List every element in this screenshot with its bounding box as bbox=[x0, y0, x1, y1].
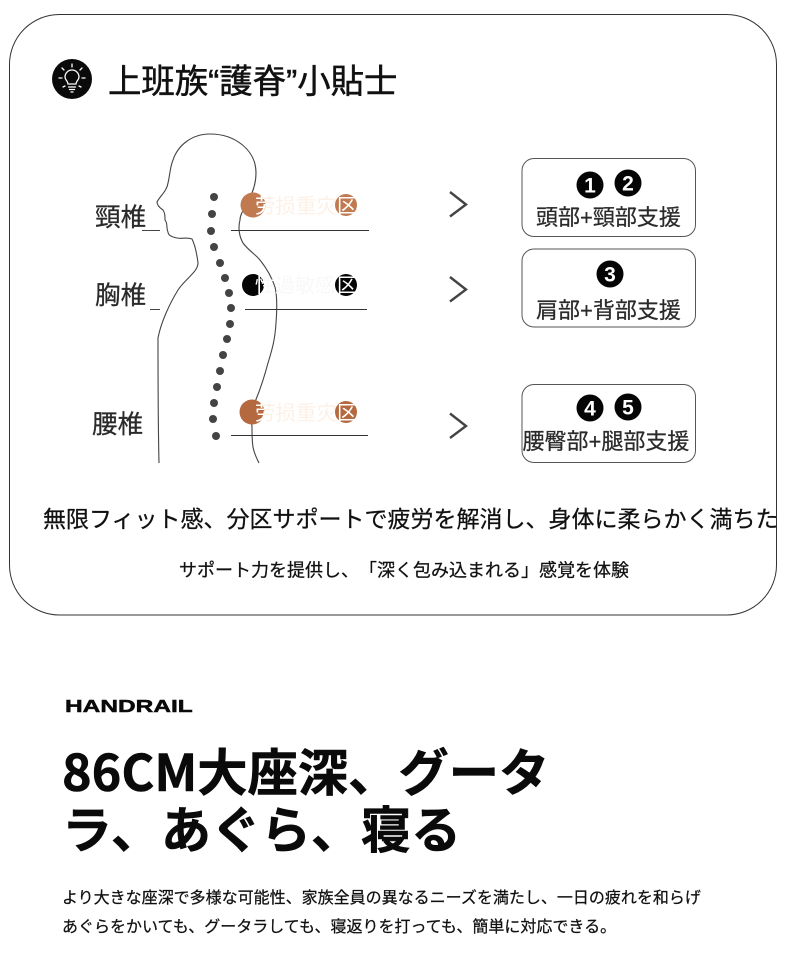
illustration: spine dots bbox=[207, 193, 235, 440]
badge: 2 bbox=[614, 170, 642, 196]
callout: thoracic sensitive zone bbox=[242, 274, 367, 310]
callout: cervical strain zone bbox=[231, 192, 369, 230]
card text: 肩部+背部支援 bbox=[536, 298, 681, 323]
heading: 86 cm deep seat: 86CM大座深、グータ bbox=[62, 734, 549, 806]
callout: lumbar strain zone: 劳损重灾 bbox=[255, 402, 337, 425]
text: support sensation statement: サポート力を提供し、「深く包み込まれる」感覚を体験 bbox=[179, 560, 629, 580]
heading: panel title: 上班族“護脊”小貼士 bbox=[108, 64, 397, 101]
card: waist, hip and leg support bbox=[522, 384, 696, 462]
callout: lumbar strain zone bbox=[231, 400, 368, 436]
text: seat description: より大きな座深で多様な可能性、家族全員の異なるニーズを満たし、一日の疲れを和らげ bbox=[62, 889, 701, 907]
label: thoracic spine: 胸椎 bbox=[95, 282, 146, 310]
arrow: lumbar to waist and leg support bbox=[450, 414, 466, 438]
heading: 86 cm deep seat bbox=[62, 734, 549, 863]
callout: cervical strain zone: 劳损重灾 bbox=[255, 195, 337, 218]
badge: 3: 3 bbox=[604, 264, 616, 286]
badge: 2: 2 bbox=[622, 172, 634, 196]
text: fit and support statement: 無限フィット感、分区サポートで疲労を解消し、身体に柔らかく満ちた bbox=[43, 506, 779, 532]
text: seat description bbox=[62, 889, 701, 936]
icon: light bulb bbox=[52, 59, 92, 99]
callout: lumbar strain zone: 区 bbox=[337, 402, 358, 425]
label: cervical spine: 頸椎 bbox=[95, 204, 146, 232]
badge: 4 bbox=[576, 394, 604, 422]
callout: cervical strain zone: 劳 bbox=[255, 195, 276, 218]
callout: lumbar strain zone: 劳 bbox=[255, 402, 276, 425]
callout: thoracic sensitive zone: 性 bbox=[255, 274, 275, 297]
badge: 1 bbox=[576, 172, 604, 198]
panel: office worker spine tips bbox=[10, 14, 779, 615]
badge: 4: 4 bbox=[584, 398, 596, 420]
arrow: cervical to head and neck support bbox=[450, 192, 466, 216]
label: lumbar spine: 腰椎 bbox=[92, 411, 143, 439]
callout: thoracic sensitive zone: 区 bbox=[337, 275, 357, 297]
logo: HANDRAIL: HANDRAIL bbox=[65, 696, 193, 716]
card text: 頭部+頸部支援 bbox=[536, 205, 681, 230]
arrow: thoracic to shoulder and back support bbox=[450, 277, 466, 302]
callout: cervical strain zone: 区 bbox=[337, 195, 358, 218]
card text: 腰臀部+腿部支援 bbox=[522, 429, 689, 454]
illustration: human body outline bbox=[157, 134, 277, 463]
badge: 1: 1 bbox=[584, 174, 596, 198]
card: shoulder and back support bbox=[522, 249, 696, 327]
text: seat description: あぐらをかいても、グータラしても、寝返りを打っても、簡単に対応できる。 bbox=[62, 918, 616, 936]
badge: 3 bbox=[596, 260, 624, 288]
badge: 5 bbox=[614, 394, 642, 420]
callout: thoracic sensitive zone: 性過敏感 bbox=[255, 274, 335, 297]
badge: 5: 5 bbox=[622, 396, 634, 420]
card: head and neck support bbox=[522, 158, 696, 236]
heading: 86 cm deep seat: ラ、あぐら、寝る bbox=[62, 791, 461, 863]
